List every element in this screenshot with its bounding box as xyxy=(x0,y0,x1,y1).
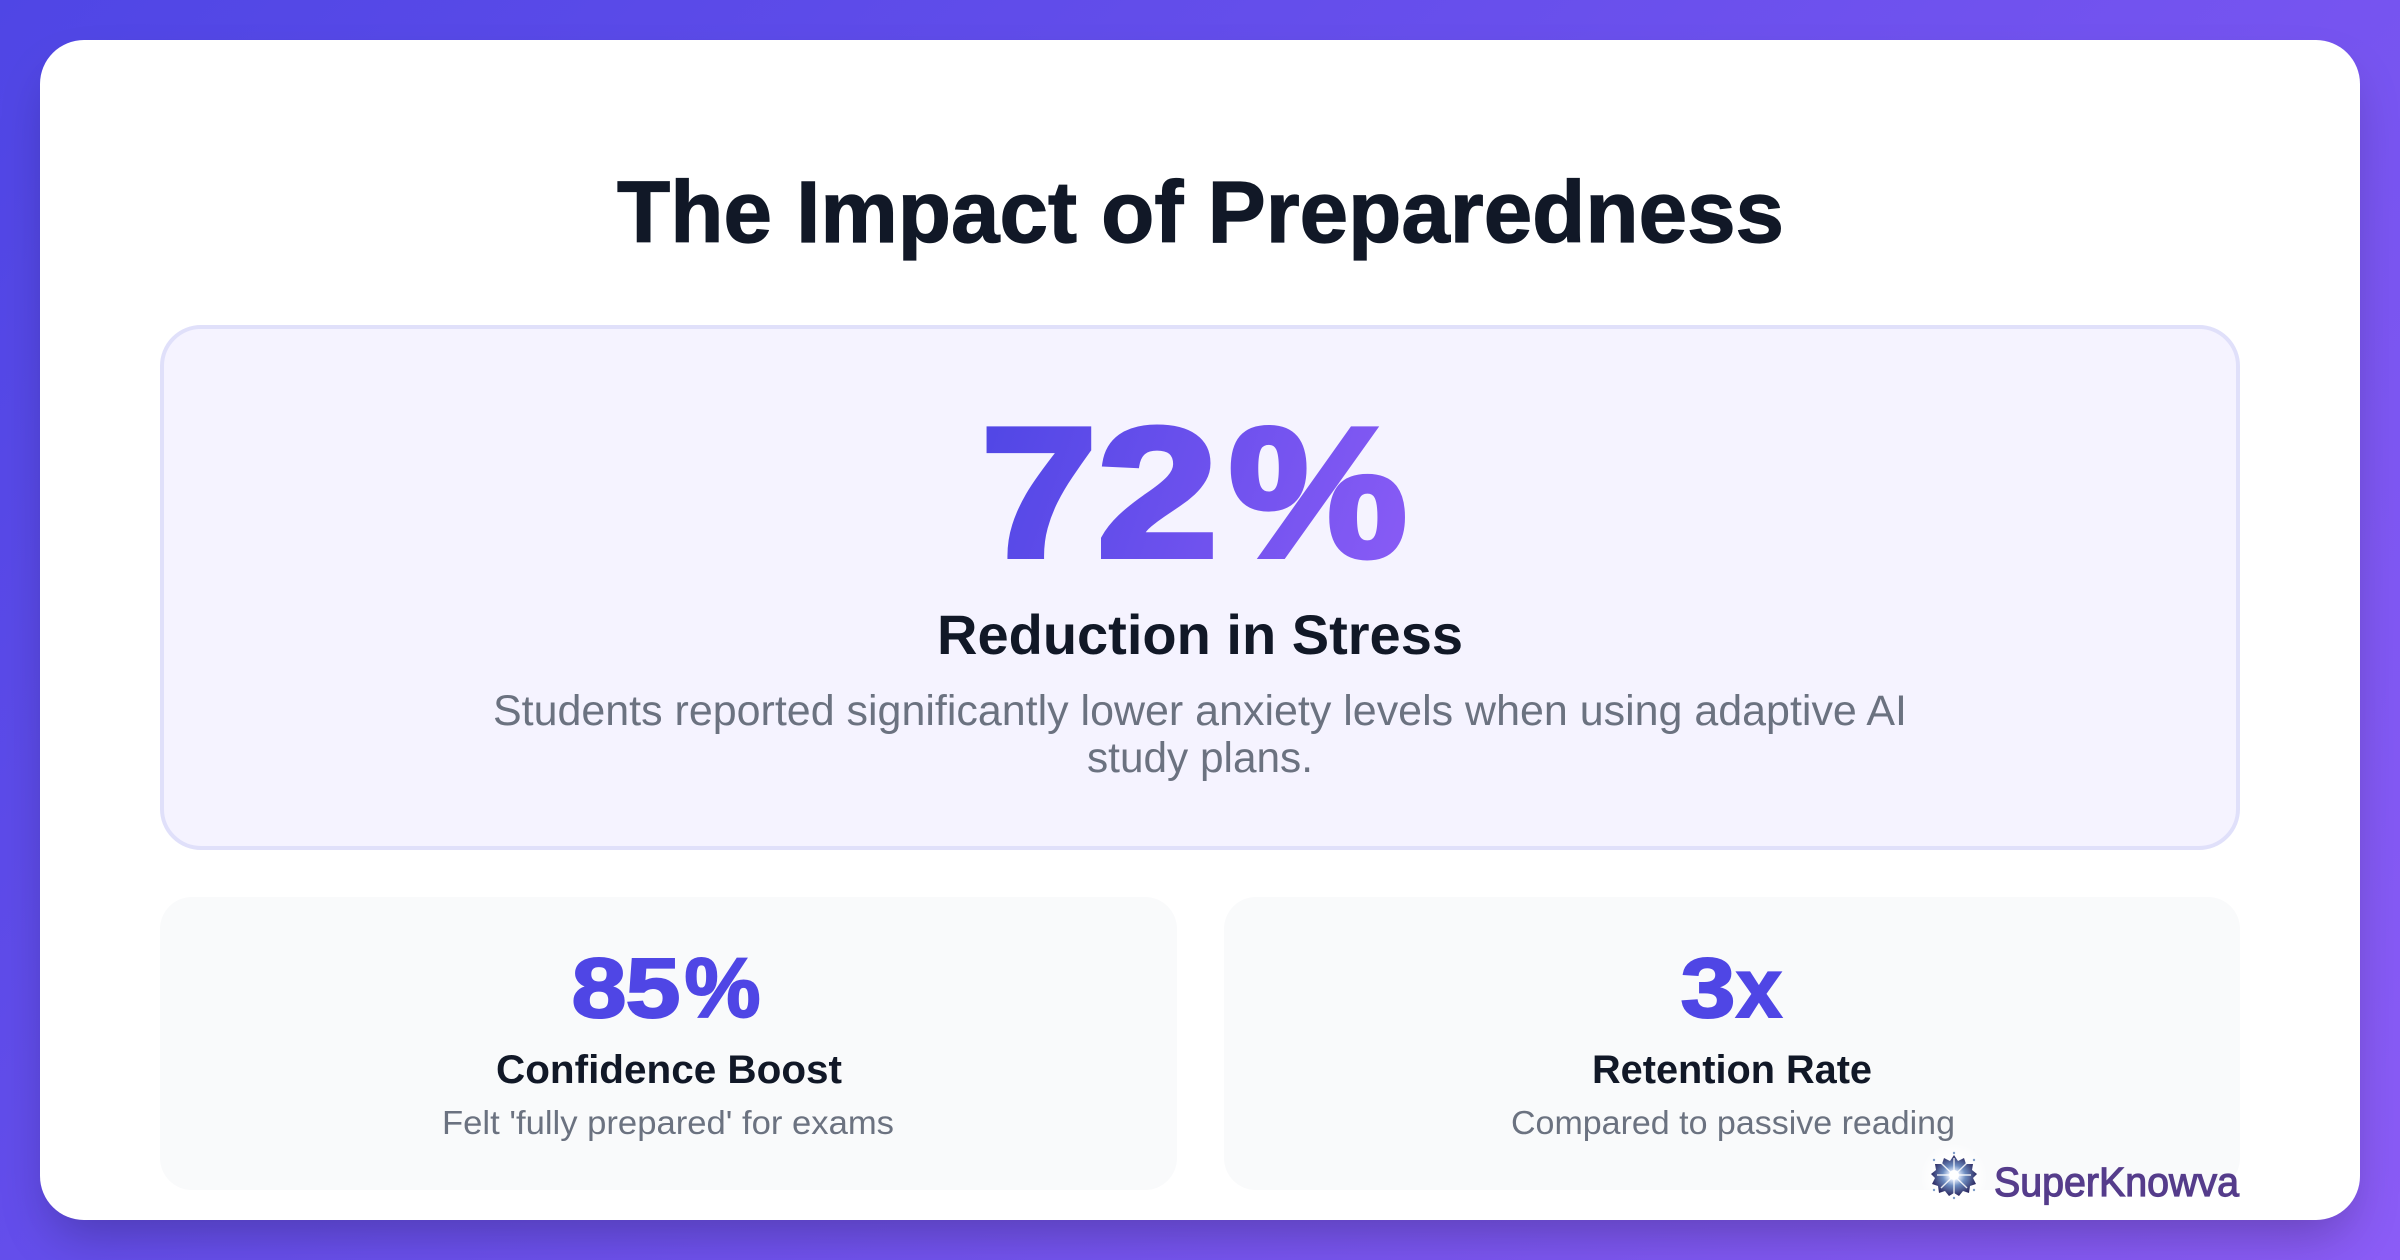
description: study plans. xyxy=(1087,734,1313,782)
big number 72%: 7 xyxy=(981,389,1097,595)
number 85% xyxy=(572,941,760,1035)
heading: reduction in stress: Reduction in Stress xyxy=(937,603,1463,666)
caption: Felt 'fully prepared' for exams xyxy=(442,1104,894,1141)
number 85%: % xyxy=(684,941,760,1035)
panel: retention rate xyxy=(1224,897,2240,1190)
card background xyxy=(1224,897,2240,1190)
title: The Impact of Preparedness xyxy=(617,164,1784,261)
panel: main statistic xyxy=(162,327,2238,848)
description: Students reported significantly lower anxiety levels when using adaptive AI xyxy=(493,687,1907,735)
caption: Compared to passive reading xyxy=(1511,1104,1955,1141)
number 3x xyxy=(1680,941,1782,1035)
number 85%: 8 xyxy=(572,941,626,1035)
big number 72%: % xyxy=(1229,389,1407,595)
label: Confidence Boost xyxy=(496,1048,842,1092)
number 3x: x xyxy=(1736,941,1782,1035)
panel background xyxy=(162,327,2238,848)
description xyxy=(493,687,1907,782)
panel: confidence boost xyxy=(160,897,1177,1190)
number 3x: 3 xyxy=(1680,941,1736,1035)
icon: star xyxy=(1920,1143,1988,1211)
wordmark: SuperKnowva xyxy=(1994,1159,2239,1205)
big number 72%: 2 xyxy=(1097,389,1218,595)
card background xyxy=(160,897,1177,1190)
big number 72% xyxy=(981,389,1407,595)
number 85%: 5 xyxy=(626,941,680,1035)
logo: SuperKnowva xyxy=(1920,1143,2239,1211)
label: Retention Rate xyxy=(1592,1048,1872,1092)
